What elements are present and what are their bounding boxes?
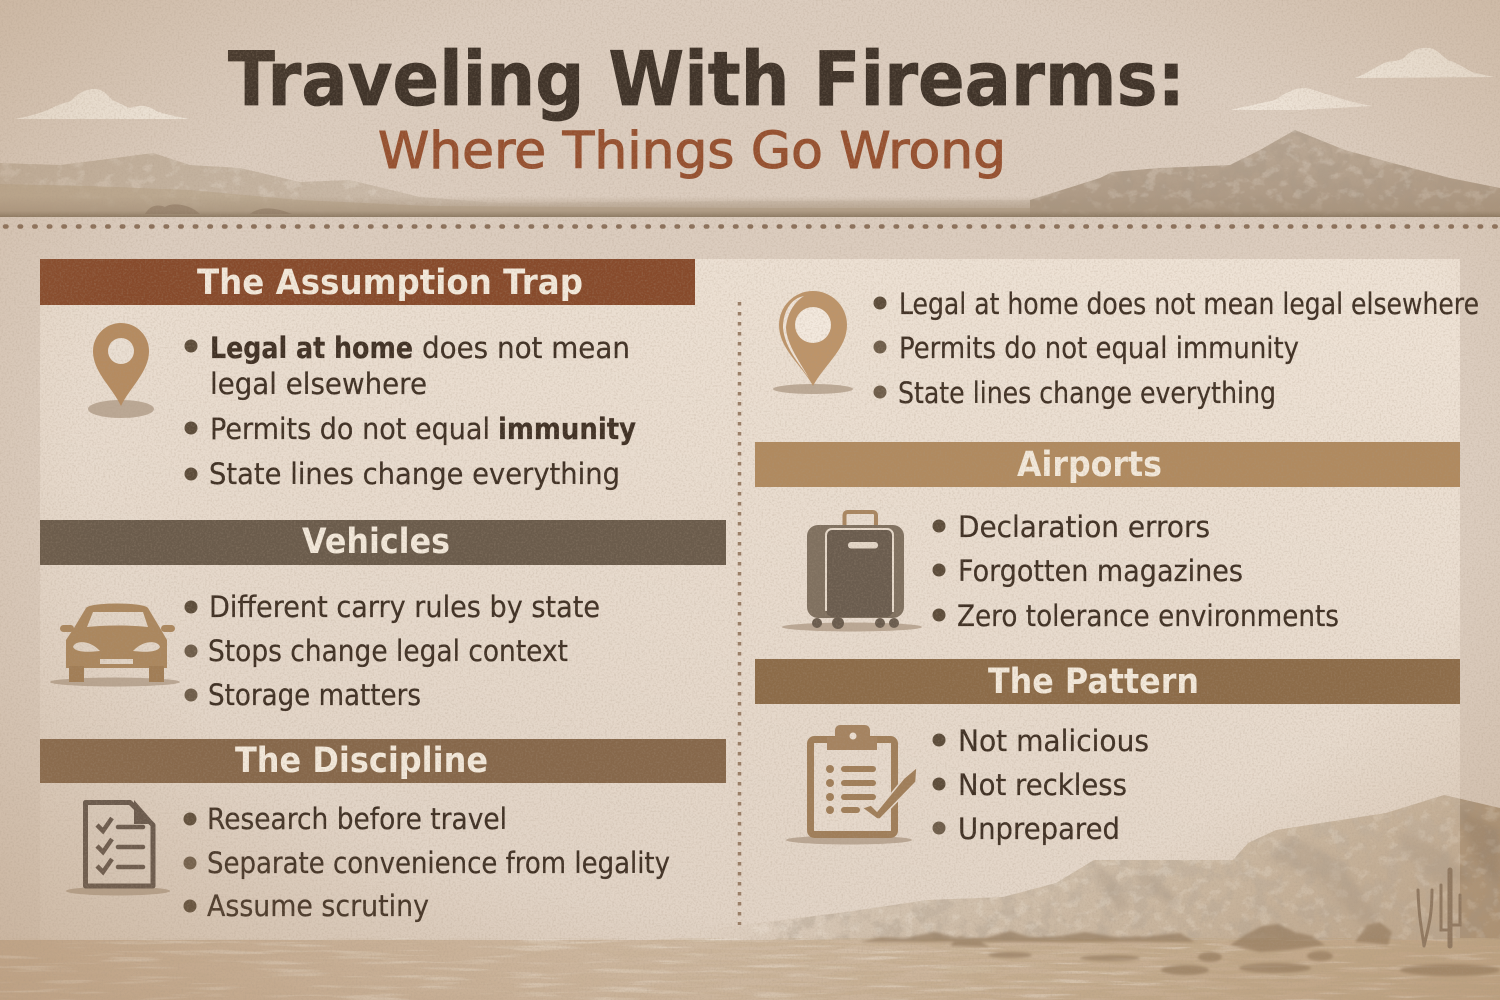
bullet list: Stops change legal context [208, 634, 568, 668]
icon: car [50, 604, 180, 686]
bullet list: Unprepared [958, 812, 1120, 846]
icon: map pin [88, 323, 154, 418]
bullet list: State lines change everything [209, 457, 620, 491]
bullet list: does not mean [422, 331, 630, 365]
bullet list [184, 802, 670, 923]
clouds [15, 48, 1495, 119]
heading: the pattern: The Pattern [988, 662, 1199, 702]
heading: airports [755, 442, 1460, 487]
icon: checklist document [66, 800, 170, 896]
panel: vehicles [40, 520, 726, 712]
horizon band with shrubs [0, 196, 1500, 217]
icon: map pin large [773, 291, 853, 394]
bullet list: Storage matters [208, 678, 421, 712]
heading: the assumption trap: The Assumption Trap [197, 263, 583, 303]
subtitle: Where Things Go Wrong [378, 122, 1006, 181]
bullet list: Permits do not equal [210, 412, 490, 446]
heading: the discipline: The Discipline [235, 741, 488, 781]
bullet list [184, 590, 600, 712]
heading: the discipline [40, 739, 726, 783]
mountains: top right [1030, 130, 1500, 217]
desert brush [860, 922, 1500, 976]
heading: airports: Airports [1017, 445, 1162, 485]
background: desert paper [0, 48, 1500, 229]
heading: vehicles: Vehicles [302, 522, 450, 562]
heading: the assumption trap [40, 259, 695, 305]
bullet list: Research before travel [207, 802, 507, 836]
bullet list: Assume scrutiny [207, 889, 429, 923]
bullet list [932, 510, 1339, 633]
bullet list: Not reckless [958, 768, 1127, 802]
bullet list: immunity [498, 412, 636, 446]
dotted divider: horizontal [5, 224, 1500, 229]
bullet list: Forgotten magazines [958, 554, 1243, 588]
panel: the discipline [40, 739, 726, 923]
panel: the pattern [755, 659, 1460, 846]
bullet list: Legal at home [210, 331, 413, 365]
bullet list [874, 287, 1479, 410]
panel: airports [755, 442, 1460, 633]
bullet list: Permits do not equal immunity [899, 331, 1299, 365]
panel: right top summary [773, 287, 1479, 410]
title [228, 35, 1185, 181]
landscape: bottom [700, 795, 1500, 945]
icon: cactus [1418, 870, 1460, 946]
panel: content background [40, 259, 1460, 940]
bullet list: Different carry rules by state [209, 590, 600, 624]
heading: vehicles [40, 520, 726, 565]
heading: the pattern [755, 659, 1460, 704]
dotted divider: vertical [738, 302, 741, 925]
title main line: Traveling With Firearms: [228, 35, 1185, 123]
bullet list: Not malicious [958, 724, 1149, 758]
panel: the assumption trap [40, 259, 695, 491]
bullet list: Declaration errors [958, 510, 1210, 544]
mountain shadow facets [1097, 816, 1500, 920]
bullet list: legal elsewhere [210, 367, 427, 401]
bullet list: Separate convenience from legality [207, 846, 670, 880]
bullet list: State lines change everything [898, 376, 1276, 410]
bullet list [184, 331, 636, 491]
bullet list: Zero tolerance environments [957, 599, 1339, 633]
icon: suitcase [782, 512, 922, 632]
icon: clipboard with check [786, 725, 917, 844]
bullet list [932, 724, 1149, 846]
ground: bottom [0, 870, 1500, 1000]
mountains: top left [0, 153, 1030, 214]
